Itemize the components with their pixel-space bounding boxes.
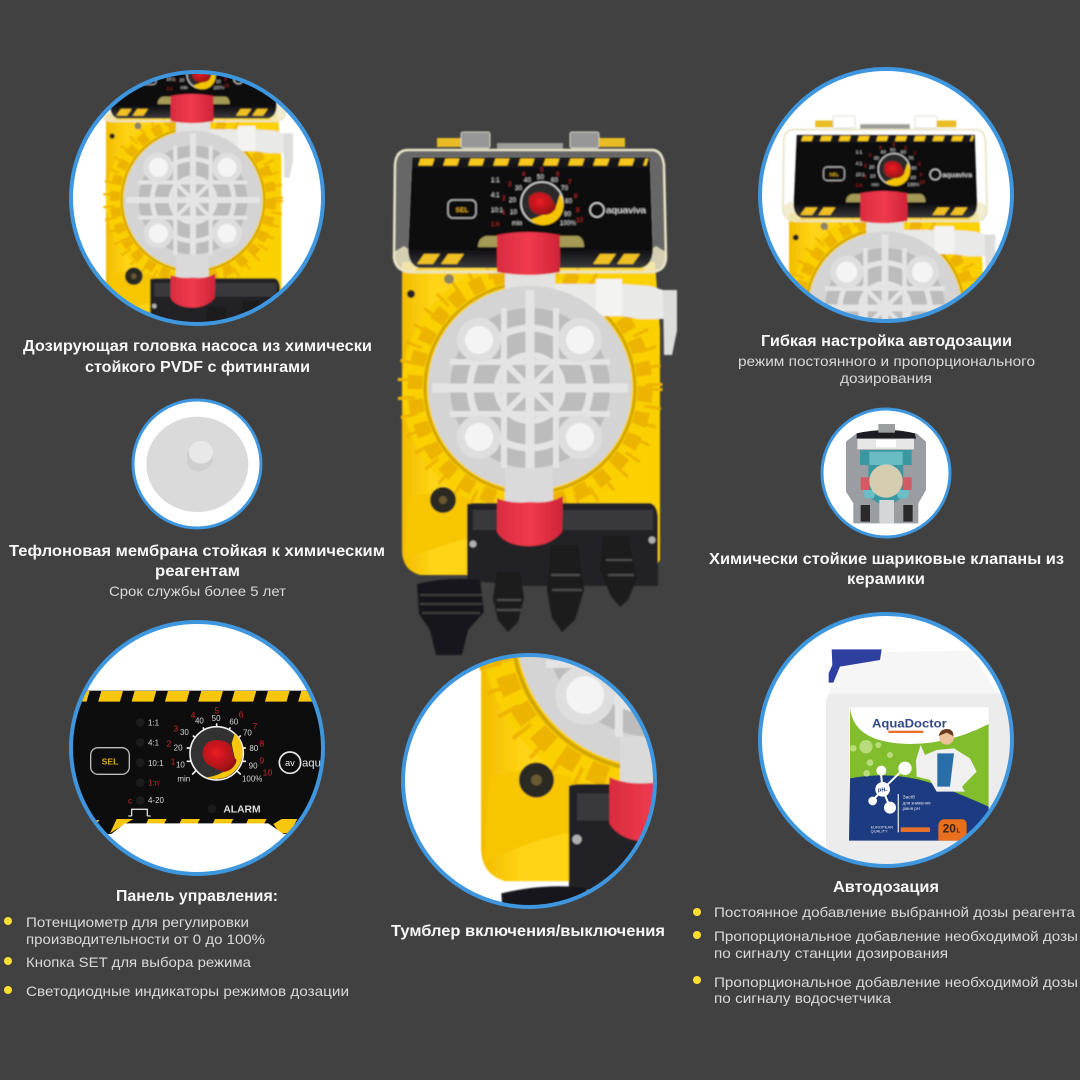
caption: pump head: Дозирующая головка насоса из химически [23, 338, 372, 355]
canister with label [826, 649, 1020, 870]
control panel face: 100% [242, 775, 262, 784]
list: auto-dosing features: Пропорциональное добавление необходимой дозы [714, 974, 1078, 990]
canister with label: 20 [943, 822, 956, 836]
control panel face: 30 [180, 728, 189, 737]
caption: teflon membrane: Срок службы более 5 лет [109, 583, 287, 599]
control panel face: 70 [243, 728, 252, 737]
main pump illustration [394, 132, 677, 655]
canister with label: L [957, 829, 961, 835]
control panel face: 4-20 [148, 796, 165, 805]
canister with label: для зниження [903, 801, 931, 806]
control panel face: ALARM [223, 805, 261, 816]
canister with label: EUROPEAN [871, 824, 893, 829]
control panel face: 4:1 [148, 739, 160, 748]
canister with label: AquaDoctor [872, 716, 947, 730]
circle: teflon membrane [133, 400, 261, 528]
list: auto-dosing features [693, 904, 1078, 1006]
canister with label: рівня рН [903, 806, 920, 811]
valve cross-section [846, 424, 926, 523]
circle: AquaDoctor canister [760, 614, 1020, 870]
circle: pump head close-up [69, 70, 325, 326]
list: control panel features: Светодиодные индикаторы режимов дозации [26, 983, 349, 999]
control panel face: c [128, 795, 133, 805]
membrane disc [146, 417, 248, 512]
list: control panel features: Кнопка SET для выбора режима [26, 954, 251, 970]
caption: teflon membrane [9, 543, 385, 599]
circle: ceramic ball valve [822, 409, 950, 537]
control panel face: 6 [239, 710, 244, 720]
control panel face: 10:1 [148, 759, 164, 768]
control panel face: 5 [214, 705, 219, 715]
control panel face: 4 [191, 710, 196, 720]
control panel face: 1 [171, 757, 176, 767]
canister with label: QUALITY [871, 829, 888, 834]
list: control panel features: производительности от 0 до 100% [26, 931, 265, 947]
caption: ceramic ball valves: Химически стойкие шариковые клапаны из [709, 551, 1064, 568]
heading: control panel: Панель управления: [116, 888, 278, 905]
canister with label: pH- [878, 787, 887, 793]
control panel face: av [285, 758, 295, 768]
control panel face: 9 [259, 756, 264, 766]
caption: pump head [23, 338, 372, 376]
list: control panel features [4, 914, 349, 999]
caption: flexible auto-dosing setup: Гибкая настройка автодозации [761, 333, 1012, 350]
caption: pump head: стойкого PVDF с фитингами [85, 359, 310, 376]
caption: teflon membrane: реагентам [155, 563, 240, 580]
control panel face: aqu [302, 758, 321, 770]
caption: ceramic ball valves [709, 551, 1064, 588]
control panel face: 7 [253, 721, 258, 731]
list: auto-dosing features: Пропорциональное добавление необходимой дозы [714, 928, 1078, 944]
circle: control cover close-up [758, 67, 1014, 323]
control panel face: 1:1 [148, 718, 160, 727]
control panel face: 3 [173, 724, 178, 734]
control panel face: 60 [229, 718, 239, 727]
control panel face: 10 [176, 760, 185, 769]
control panel face: 80 [249, 744, 259, 753]
control panel face: 20 [174, 744, 183, 753]
list: auto-dosing features: по сигналу водосчетчика [714, 990, 891, 1006]
canister with label: Засіб [903, 794, 915, 800]
caption: flexible auto-dosing setup: дозирования [840, 370, 932, 386]
control panel face: 50 [212, 714, 221, 723]
control panel face: 40 [195, 717, 204, 726]
caption: flexible auto-dosing setup: режим постоянного и пропорционального [738, 353, 1035, 369]
control panel face: 2 [167, 738, 172, 748]
caption: teflon membrane: Тефлоновая мембрана стойкая к химическим [9, 543, 385, 560]
list: auto-dosing features: по сигналу станции дозирования [714, 945, 948, 961]
control panel face: 8 [259, 738, 264, 748]
control panel face: 1:n [148, 779, 159, 788]
circle: control panel close-up [58, 622, 331, 880]
control panel face [73, 690, 321, 834]
list: auto-dosing features: Постоянное добавление выбранной дозы реагента [714, 904, 1075, 920]
control panel face: 90 [249, 761, 258, 770]
heading: auto-dosing: Автодозация [833, 879, 939, 896]
caption: ceramic ball valves: керамики [847, 571, 925, 588]
control panel face: 10 [263, 768, 272, 778]
control panel face: min [177, 775, 190, 784]
list: control panel features: Потенциометр для регулировки [26, 914, 249, 930]
caption: flexible auto-dosing setup [738, 333, 1035, 386]
circle: on/off toggle close-up [401, 653, 657, 909]
caption: toggle: Тумблер включения/выключения [391, 923, 665, 940]
control panel face: SEL [102, 756, 119, 766]
